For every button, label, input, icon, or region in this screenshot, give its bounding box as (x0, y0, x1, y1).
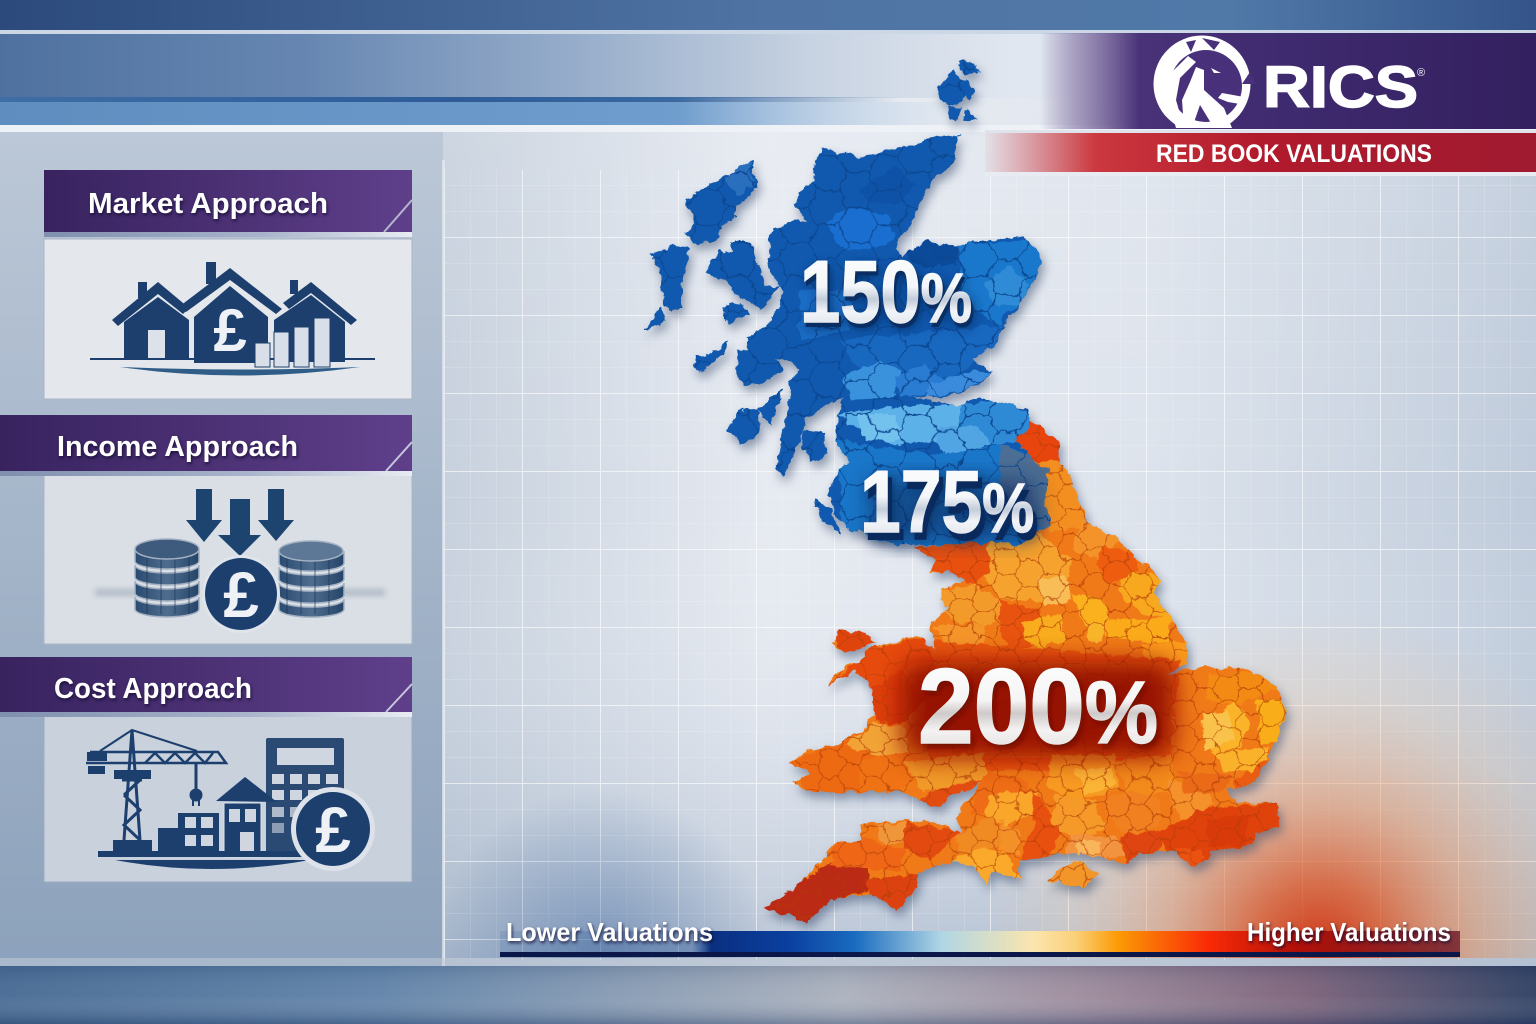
percentage label: 175%: 175% (864, 458, 1038, 557)
legend colour bar (500, 931, 1460, 957)
heading bar: market approach: Market Approach (88, 188, 328, 220)
icon: RICS lion roundel (1154, 36, 1256, 132)
map region: England and Wales (760, 420, 1300, 930)
percentage label: 150%: 150% (800, 242, 972, 341)
legend: valuation colour scale (500, 917, 1460, 957)
south central (985, 790, 1040, 825)
map of the UK (630, 50, 1300, 930)
east anglia (1205, 672, 1280, 705)
heading bar: income approach (0, 415, 412, 476)
icon: crane, buildings, calculator and pound (86, 730, 375, 871)
Red Book banner (985, 130, 1536, 176)
legend label: lower: Lower Valuations (506, 917, 713, 947)
north (1016, 421, 1060, 463)
icon: coins with pound and arrows (95, 489, 385, 633)
panel: market approach (44, 170, 412, 399)
small building (158, 813, 219, 857)
percentage label: 200%: 200% (921, 650, 1161, 770)
banner text: RED BOOK VALUATIONS (1156, 140, 1432, 168)
pound coin (291, 787, 375, 871)
RICS wordmark: RICS (1263, 55, 1418, 120)
calculator (266, 738, 344, 857)
house (216, 777, 277, 802)
percentage label: 150%: 150% (802, 246, 974, 345)
icon: houses with pound sign and bar chart (90, 262, 375, 376)
coin stack right (279, 541, 344, 617)
icon: coins with pound and arrows: £ (223, 559, 259, 631)
crane (86, 730, 226, 840)
midlands (970, 770, 1030, 815)
percentage label: 200%: 200% (918, 646, 1158, 766)
legend label: higher: Higher Valuations (1247, 917, 1451, 947)
pound coin (202, 555, 280, 633)
percentage label: 175%: 175% (860, 452, 1034, 551)
bottom band (0, 958, 1536, 1024)
panel: cost approach (0, 657, 412, 882)
panel: income approach (0, 415, 412, 644)
heading bar: market approach (44, 170, 412, 237)
icon: crane, buildings, calculator and pound: £ (315, 794, 351, 866)
card: cost approach (44, 716, 412, 882)
heading bar: income approach: Income Approach (57, 431, 298, 463)
registered mark: ® (1417, 67, 1425, 79)
arrows down (186, 489, 294, 556)
top header bands (0, 0, 1536, 132)
wales (836, 629, 878, 652)
icon: houses with pound sign and bar chart: £ (213, 297, 247, 364)
map region: Scotland (630, 50, 1060, 560)
RICS logo banner (1040, 33, 1536, 132)
heading bar: cost approach (0, 657, 412, 717)
south east (1120, 830, 1162, 862)
card: income approach (44, 474, 412, 644)
band behind 200% (920, 640, 1180, 770)
percentage label: 175%: 175% (864, 459, 1038, 558)
heading bar: cost approach: Cost Approach (54, 673, 252, 705)
coin stack left (135, 539, 199, 617)
card: market approach (44, 239, 412, 399)
south west (760, 862, 872, 926)
percentage label: 150%: 150% (803, 247, 975, 346)
